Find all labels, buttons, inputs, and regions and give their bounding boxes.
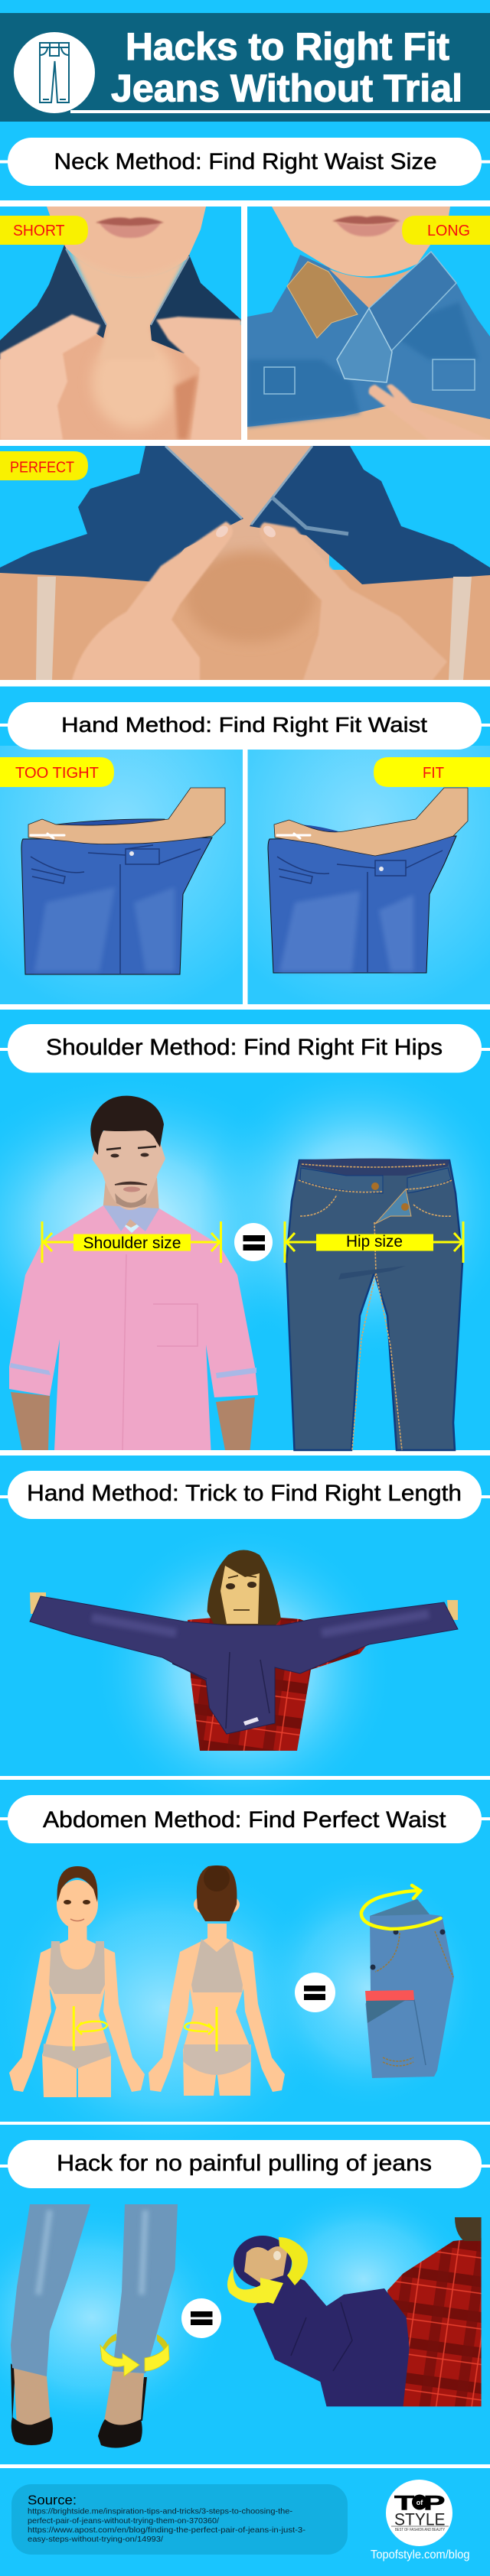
callout: hip size: Hip size	[346, 1233, 403, 1251]
heading pill: neck method: Neck Method: Find Right Waist Size	[54, 149, 436, 174]
heading pill: no painful pulling hack: Hack for no painful pulling of jeans	[57, 2151, 432, 2176]
panel: length method	[0, 1471, 490, 1820]
photo: short collar	[0, 207, 241, 440]
source panel	[11, 2484, 348, 2555]
man in pink shirt	[9, 1096, 258, 1450]
label: perfect: PERFECT	[10, 459, 74, 476]
header banner	[0, 13, 490, 122]
source panel: https://www.apost.com/en/blog/finding-the-perfect-pair-of-jeans-in-just-3-	[28, 2526, 306, 2535]
title: Jeans Without Trial	[111, 67, 462, 110]
panel: no painful pulling hack	[0, 2140, 490, 2468]
callout: shoulder size: Shoulder size	[83, 1234, 181, 1252]
hand: left	[0, 314, 100, 440]
jeans illustration	[286, 1158, 462, 1450]
source panel: https://brightside.me/inspiration-tips-and-tricks/3-steps-to-choosing-the-	[28, 2507, 293, 2516]
label: too tight: TOO TIGHT	[15, 765, 99, 782]
illustration: too tight jeans and arm	[21, 788, 225, 974]
logo: top of style: BEST OF FASHION AND BEAUTY	[395, 2528, 445, 2532]
photo: perfect collar	[0, 446, 490, 680]
woman holding jeans across arms	[30, 1550, 458, 1751]
folded jeans illustration	[361, 1885, 454, 2078]
equals sign	[234, 1223, 273, 1261]
logo: top of style: T P	[394, 2492, 446, 2515]
callout: hip size	[285, 1221, 463, 1263]
hand: right	[156, 317, 241, 440]
logo: top of style: STYLE	[394, 2510, 446, 2529]
hand: right pointing finger	[260, 522, 447, 680]
callout: shoulder size	[42, 1221, 220, 1263]
source panel: Source:	[28, 2492, 77, 2507]
arrows: waist measure on figures	[74, 2006, 217, 2051]
panel: shoulder method	[0, 1024, 490, 1456]
heading pill: shoulder method: Shoulder Method: Find Right Fit Hips	[46, 1035, 443, 1060]
logo: top of style: of	[416, 2499, 423, 2506]
equals sign	[181, 2298, 221, 2338]
heading pill: neck method	[0, 138, 490, 186]
logo: top of style	[386, 2480, 452, 2546]
heading pill: abdomen method	[8, 1795, 482, 1843]
label: too tight	[0, 757, 114, 787]
equals sign	[295, 1973, 335, 2012]
illustration: fit jeans and arm	[268, 788, 468, 973]
heading pill: hand method waist	[8, 702, 482, 750]
panel: abdomen method	[0, 1795, 490, 2165]
label: short	[0, 216, 88, 245]
figure: woman front	[9, 1866, 145, 2097]
label: perfect	[0, 451, 88, 480]
heading pill: abdomen method: Abdomen Method: Find Perfect Waist	[43, 1807, 446, 1833]
label: fit	[374, 757, 490, 787]
site url: Topofstyle.com/blog	[371, 2548, 470, 2561]
arrow: wrist ring	[227, 2237, 308, 2304]
heading pill: no painful pulling hack	[8, 2140, 482, 2188]
legs in jeans and heels	[11, 2204, 178, 2448]
heading pill: length method: Hand Method: Trick to Find Right Length	[27, 1481, 462, 1506]
source panel: perfect-pair-of-jeans-without-trying-them-on-370360/	[28, 2516, 219, 2526]
hand: pointing fingers	[368, 383, 413, 407]
arrow: ankle ring	[100, 2334, 169, 2376]
label: short: SHORT	[13, 223, 64, 239]
photo: long collar	[247, 207, 490, 440]
heading pill: length method	[8, 1471, 482, 1519]
source panel: easy-steps-without-trying-on/14993/	[28, 2535, 163, 2544]
label: fit: FIT	[423, 765, 444, 782]
label: long	[402, 216, 490, 245]
panel: neck method	[0, 138, 490, 680]
arm in jeans sleeve with plaid shirt	[227, 2217, 482, 2406]
heading pill: hand method waist: Hand Method: Find Right Fit Waist	[61, 713, 427, 737]
icon: jeans in white circle	[14, 32, 95, 113]
arrow: waist circle on jeans	[361, 1885, 441, 1929]
label: long: LONG	[427, 223, 470, 239]
panel: hand method waist	[0, 702, 490, 1010]
hand: left pointing finger	[72, 522, 233, 680]
title: Hacks to Right Fit	[126, 25, 449, 68]
heading pill: shoulder method	[8, 1024, 482, 1072]
figure: woman back	[149, 1865, 285, 2096]
